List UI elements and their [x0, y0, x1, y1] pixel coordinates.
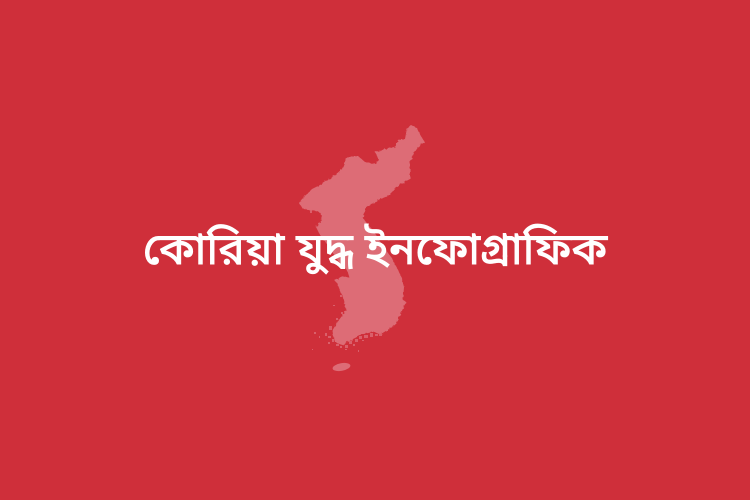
south coast island speckles — [312, 326, 388, 352]
west coast island speckles — [306, 207, 343, 320]
title: কোরিয়া যুদ্ধ ইনফোগ্রাফিক — [143, 225, 607, 274]
icon: Jeju island — [332, 362, 351, 372]
